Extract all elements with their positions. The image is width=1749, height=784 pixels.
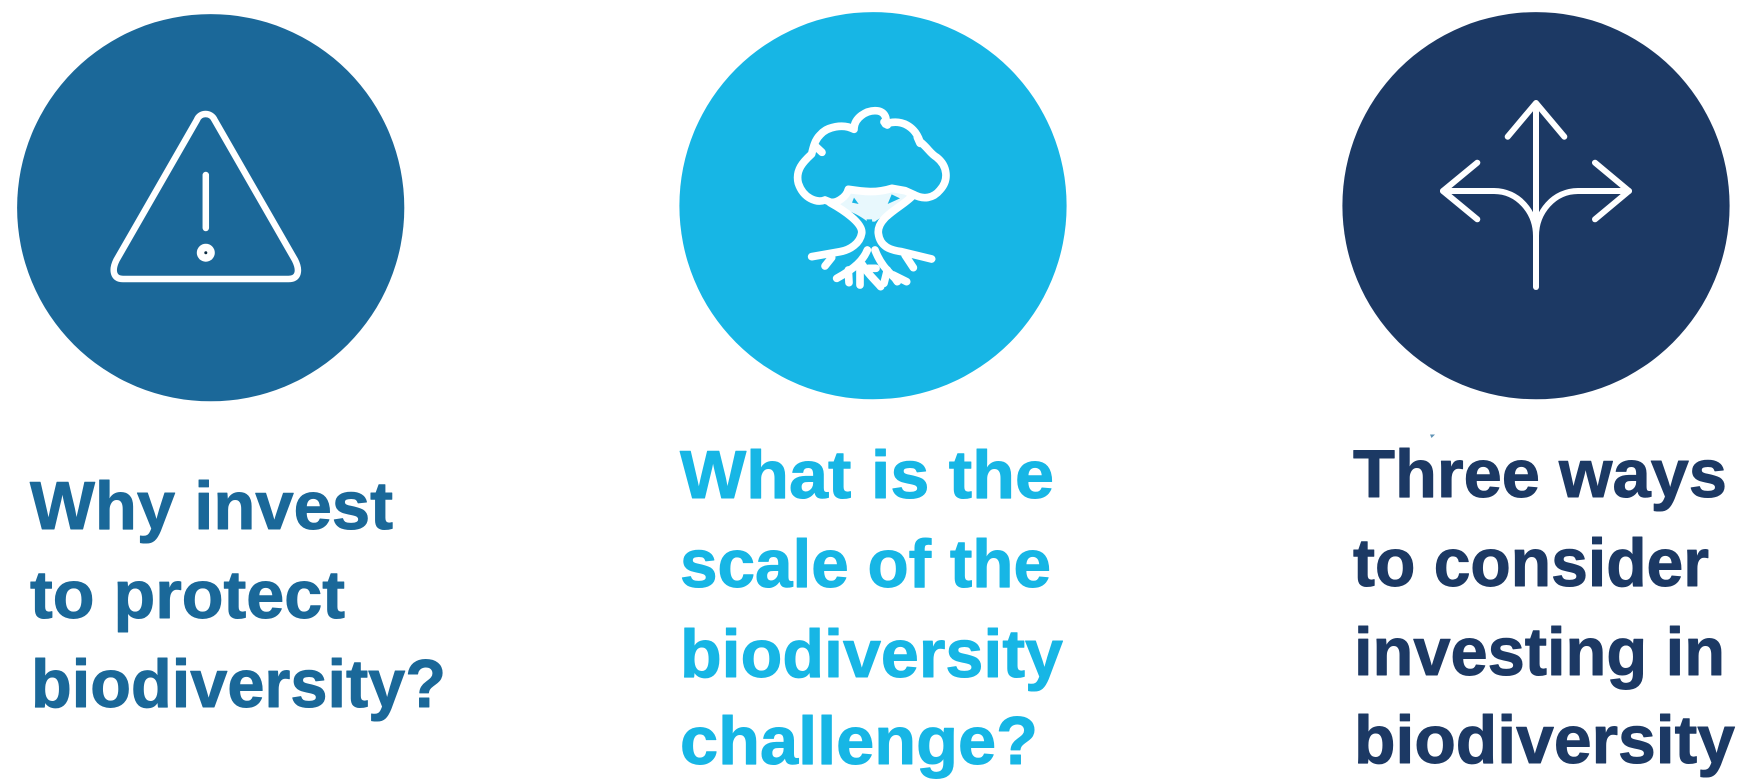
panel: three ways (1342, 12, 1735, 778)
panel: why invest (17, 14, 446, 722)
heading: why invest to protect biodiversity: to protect (30, 557, 345, 633)
heading: three ways to consider investing in biodiversity: to consider (1353, 525, 1709, 601)
heading: why invest to protect biodiversity (30, 468, 446, 722)
circle: mid blue (17, 14, 404, 401)
heading: what is the scale of the biodiversity challenge: scale of the (680, 526, 1051, 602)
stray mark (1430, 434, 1435, 438)
heading: why invest to protect biodiversity: biodiversity? (31, 646, 446, 722)
heading: what is the scale of the biodiversity challenge: biodiversity (680, 616, 1063, 692)
heading: three ways to consider investing in biodiversity: biodiversity (1354, 702, 1735, 778)
icon: three-way arrows (1443, 103, 1629, 287)
heading: three ways to consider investing in biodiversity: investing in (1354, 614, 1725, 690)
heading: what is the scale of the biodiversity challenge (680, 437, 1063, 779)
heading: why invest to protect biodiversity: Why invest (30, 468, 393, 544)
icon: tree with roots (798, 111, 946, 287)
heading: what is the scale of the biodiversity challenge: challenge? (680, 703, 1038, 779)
circle: light blue (679, 12, 1067, 399)
circle: navy (1342, 12, 1730, 399)
heading: three ways to consider investing in biodiversity (1353, 436, 1735, 778)
heading: three ways to consider investing in biodiversity: Three ways (1353, 436, 1727, 512)
panel: scale of the challenge (679, 12, 1067, 779)
icon: warning triangle (114, 114, 298, 279)
heading: what is the scale of the biodiversity challenge: What is the (680, 437, 1054, 513)
